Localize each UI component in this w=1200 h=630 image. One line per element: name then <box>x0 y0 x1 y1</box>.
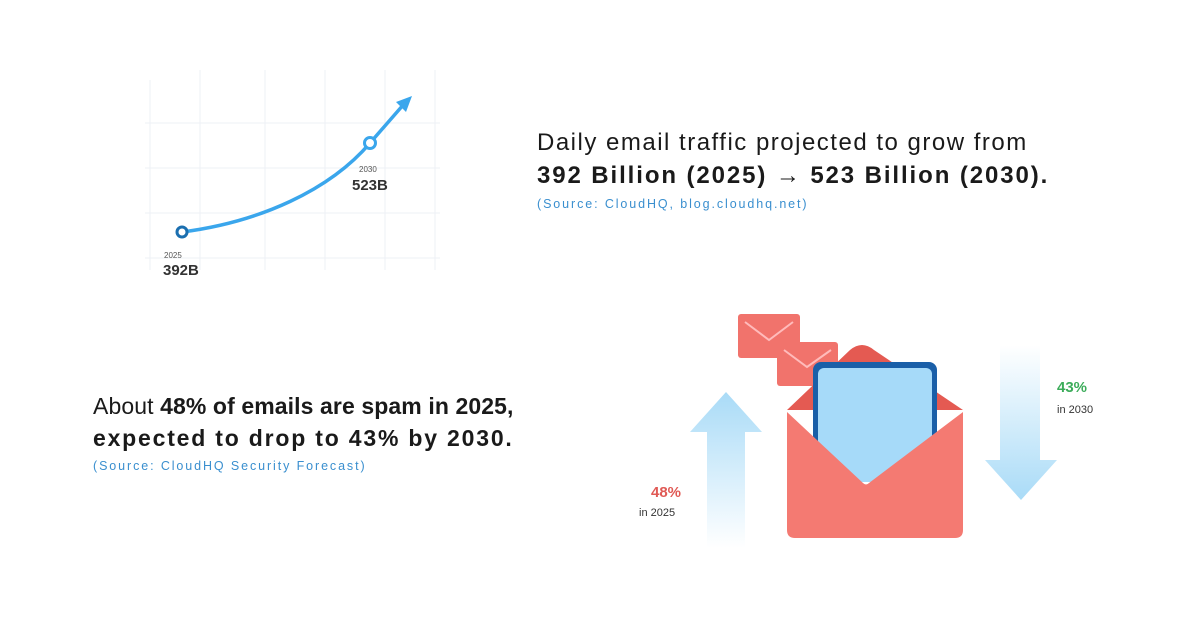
text block: spam: About 48% of emails are spam in 2025, <box>93 393 514 419</box>
text block: email traffic <box>537 129 1049 211</box>
chart: email traffic growth: 2025 <box>164 251 182 260</box>
labels: in 2025 <box>639 507 675 519</box>
chart: email traffic growth: 392B <box>163 262 199 279</box>
text block: spam <box>93 393 514 473</box>
text block: spam: (Source: CloudHQ Security Forecast) <box>93 459 367 473</box>
text block: spam: expected to drop to 43% by 2030. <box>93 425 514 451</box>
labels <box>639 379 1093 519</box>
labels: in 2030 <box>1057 404 1093 416</box>
chart: email traffic growth: 523B <box>352 177 388 194</box>
labels: 48% <box>651 484 681 501</box>
small envelopes <box>738 314 838 386</box>
text block: email traffic: Daily email traffic projected to grow from <box>537 129 1028 156</box>
chart: email traffic growth: 2030 <box>359 165 377 174</box>
labels: 43% <box>1057 379 1087 396</box>
text block: email traffic: 392 Billion (2025) → 523 Billion (2030). <box>537 162 1049 189</box>
arrow down <box>985 345 1057 500</box>
text block: email traffic: (Source: CloudHQ, blog.cloudhq.net) <box>537 197 808 211</box>
arrow up <box>690 392 762 548</box>
main envelope <box>787 345 963 538</box>
